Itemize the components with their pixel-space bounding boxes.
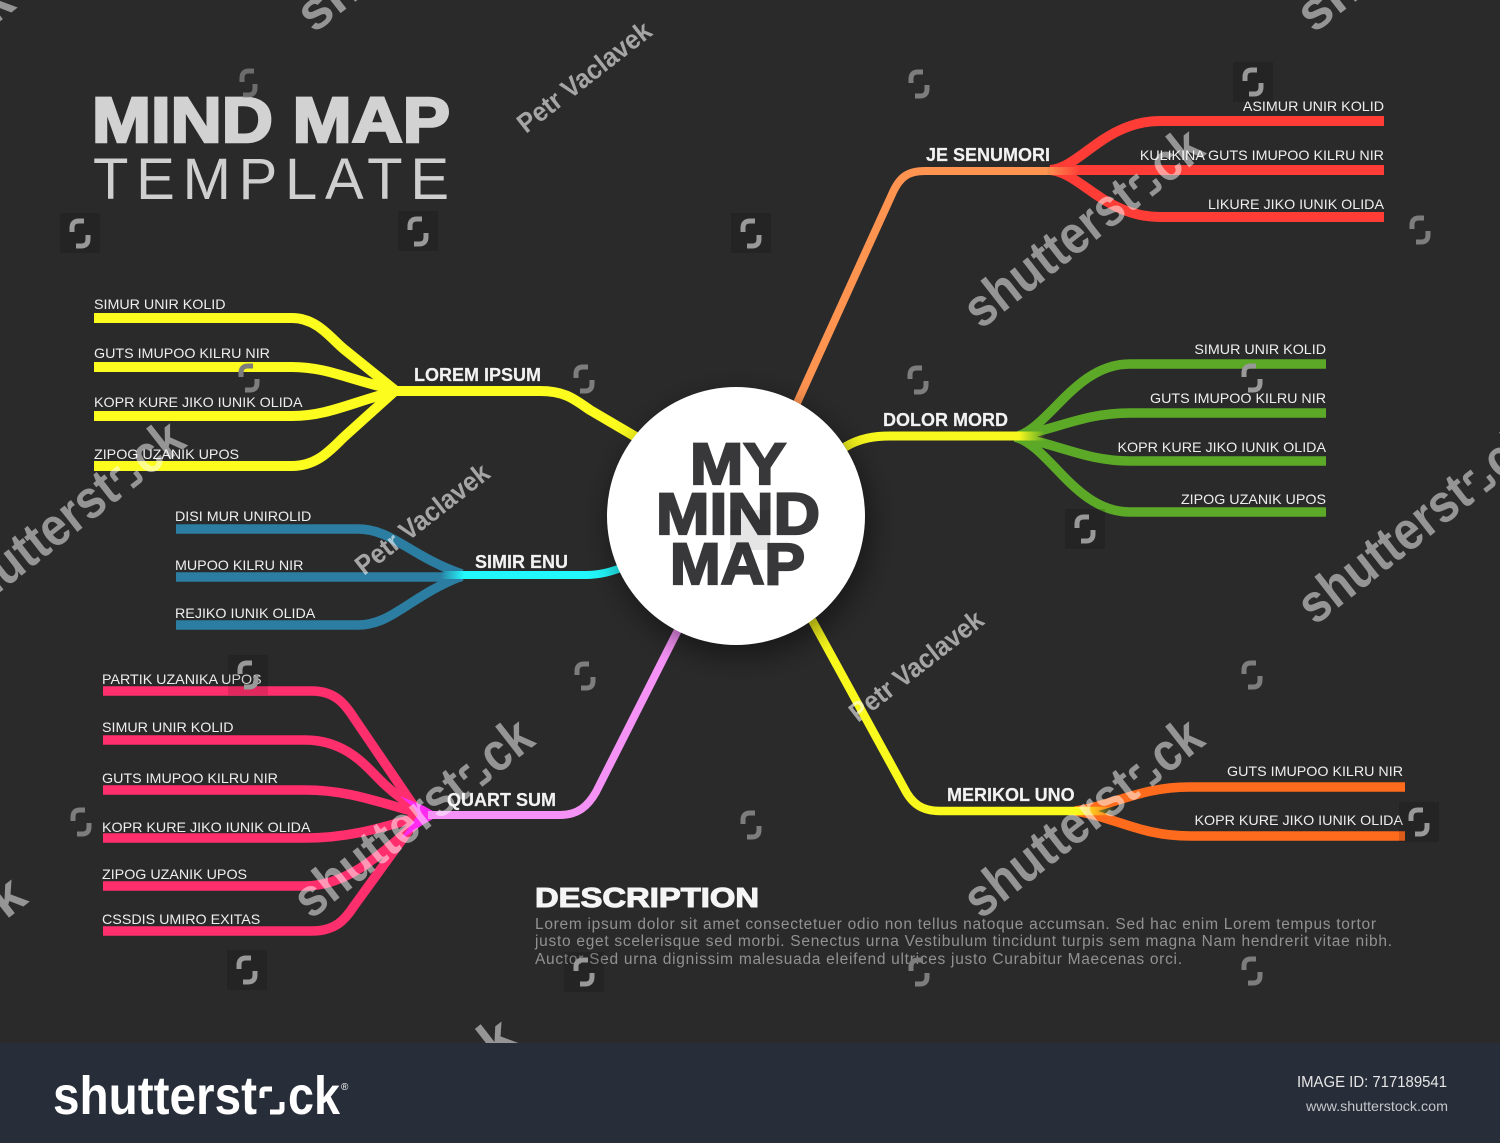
watermark: shutterstock: shutterst bbox=[1285, 463, 1483, 635]
footer bar: IMAGE ID: 717189541 bbox=[1297, 1074, 1447, 1091]
central circle: MY bbox=[690, 432, 786, 497]
watermark: shutterstock: shutterst bbox=[281, 757, 479, 929]
footer logo: ® bbox=[341, 1082, 349, 1093]
branch: lorem ipsum: LOREM IPSUM bbox=[414, 365, 541, 385]
central circle bbox=[607, 387, 870, 656]
description: Auctor Sed urna dignissim malesuada eleifend ultrices justo Curabitur Maecenas orci. bbox=[535, 951, 1182, 968]
branch: je senumori: ASIMUR UNIR KOLID bbox=[1243, 99, 1384, 115]
description: DESCRIPTION bbox=[535, 882, 759, 913]
branch: quart sum: SIMUR UNIR KOLID bbox=[102, 720, 234, 736]
footer logo: shutterst bbox=[53, 1066, 257, 1126]
watermark: shutterstock: ck bbox=[1137, 705, 1215, 785]
branch: quart sum: QUART SUM bbox=[447, 790, 556, 810]
title: TEMPLATE bbox=[93, 147, 449, 212]
branch: merikol uno: MERIKOL UNO bbox=[947, 785, 1075, 805]
branch: simir enu: SIMIR ENU bbox=[475, 552, 568, 572]
branch: quart sum bbox=[102, 630, 678, 931]
branch: merikol uno bbox=[812, 620, 1405, 836]
branch: merikol uno: GUTS IMUPOO KILRU NIR bbox=[1227, 764, 1403, 780]
watermark: petr vaclavek bbox=[349, 15, 990, 728]
branch: merikol uno: KOPR KURE JIKO IUNIK OLIDA bbox=[1195, 813, 1403, 829]
branch: je senumori: LIKURE JIKO IUNIK OLIDA bbox=[1208, 197, 1384, 213]
title: MIND MAP bbox=[92, 84, 450, 156]
branch: lorem ipsum: ZIPOG UZANIK UPOS bbox=[94, 447, 239, 463]
footer logo: ck bbox=[288, 1066, 341, 1126]
branch: quart sum: CSSDIS UMIRO EXITAS bbox=[102, 912, 260, 928]
branch: lorem ipsum: GUTS IMUPOO KILRU NIR bbox=[94, 346, 270, 362]
branch: je senumori: JE SENUMORI bbox=[926, 145, 1050, 165]
watermark: shutterstock: shutterst bbox=[951, 167, 1149, 339]
watermark icons bbox=[60, 62, 1439, 992]
branch: quart sum: GUTS IMUPOO KILRU NIR bbox=[102, 771, 278, 787]
description bbox=[534, 882, 1392, 968]
branch: simir enu bbox=[175, 509, 624, 625]
branch: quart sum: KOPR KURE JIKO IUNIK OLIDA bbox=[102, 820, 311, 836]
watermark: petr vaclavek: Petr Vaclavek bbox=[349, 457, 496, 581]
footer bar: www.shutterstock.com bbox=[1305, 1098, 1448, 1114]
watermark: shutterstock: ck bbox=[118, 407, 196, 487]
watermark: shutterstock: ck bbox=[467, 705, 545, 785]
branch: dolor mord: SIMUR UNIR KOLID bbox=[1194, 342, 1326, 358]
watermark: shutterstock: shutterst bbox=[951, 757, 1149, 929]
watermark: shutterstock: ck bbox=[1137, 115, 1215, 195]
branch: dolor mord: KOPR KURE JIKO IUNIK OLIDA bbox=[1118, 440, 1326, 456]
branch: simir enu: MUPOO KILRU NIR bbox=[175, 558, 303, 574]
branch: simir enu: DISI MUR UNIROLID bbox=[175, 509, 311, 525]
branch: quart sum: PARTIK UZANIKA UPOS bbox=[102, 672, 262, 688]
branch: dolor mord: ZIPOG UZANIK UPOS bbox=[1181, 492, 1326, 508]
watermark: shutterstock: k bbox=[466, 1005, 528, 1071]
central circle: MAP bbox=[670, 532, 805, 597]
branch: lorem ipsum: SIMUR UNIR KOLID bbox=[94, 297, 226, 313]
branch: lorem ipsum bbox=[94, 297, 636, 466]
branch: je senumori bbox=[797, 99, 1384, 403]
branch: quart sum: ZIPOG UZANIK UPOS bbox=[102, 867, 247, 883]
title bbox=[92, 84, 450, 212]
branch: dolor mord bbox=[845, 342, 1326, 512]
branch: simir enu: REJIKO IUNIK OLIDA bbox=[175, 606, 316, 622]
watermark: petr vaclavek: Petr Vaclavek bbox=[843, 604, 990, 728]
footer bar bbox=[0, 1043, 1500, 1143]
central circle: MIND bbox=[656, 482, 820, 547]
branch: dolor mord: DOLOR MORD bbox=[883, 410, 1008, 430]
description: Lorem ipsum dolor sit amet consectetuer odio non tellus natoque accumsan. Sed hac enim Lorem tempus tortor bbox=[535, 916, 1376, 933]
branch: lorem ipsum: KOPR KURE JIKO IUNIK OLIDA bbox=[94, 395, 303, 411]
watermark: petr vaclavek: Petr Vaclavek bbox=[511, 15, 658, 139]
description: justo eget scelerisque sed morbi. Senectus urna Vestibulum tincidunt turpis sem magna Nam hendrerit vitae nibh. bbox=[534, 933, 1392, 950]
branch: je senumori: KULIKINA GUTS IMUPOO KILRU NIR bbox=[1140, 148, 1384, 164]
branch: dolor mord: GUTS IMUPOO KILRU NIR bbox=[1150, 391, 1326, 407]
